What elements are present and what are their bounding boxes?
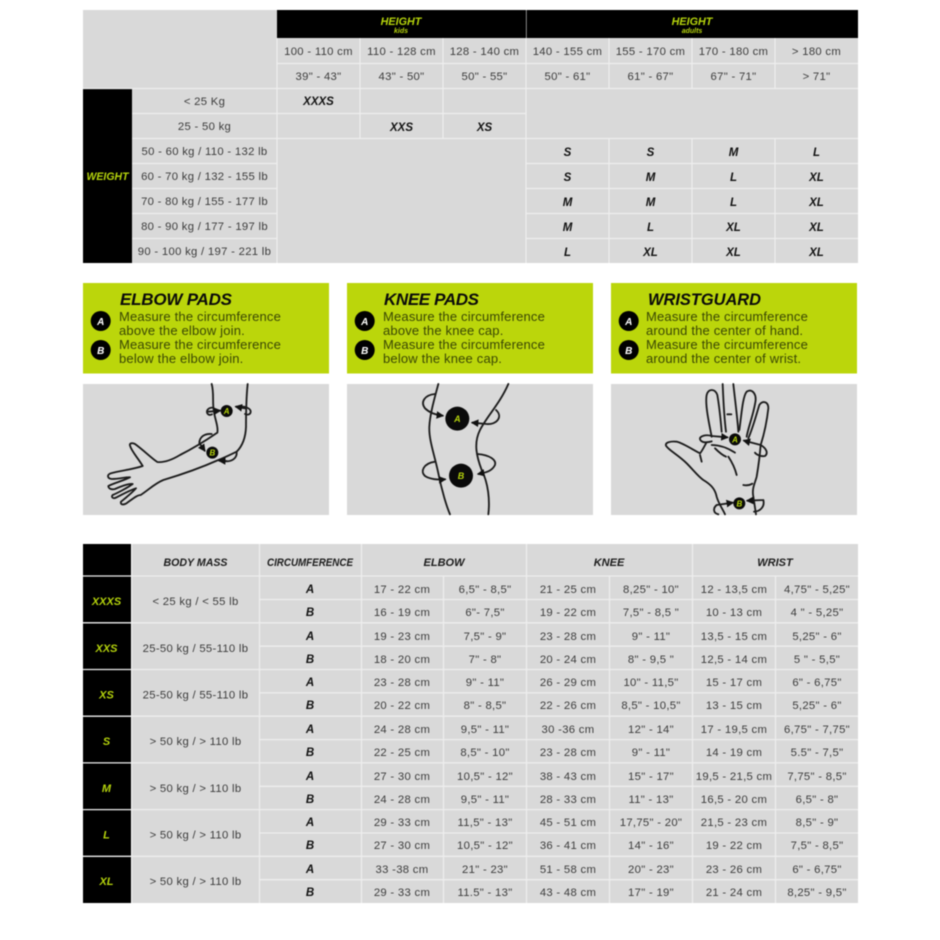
header: height adults (527, 10, 858, 38)
wristguard instructions text: around the center of wrist. (646, 351, 801, 366)
measurement values: 7,5" - 8,5" (791, 840, 843, 852)
measurement values: 51 - 58 cm (540, 864, 596, 876)
badge A: A (360, 317, 368, 328)
measurement values: 7" - 8" (469, 654, 501, 666)
circumference letters: B (306, 607, 314, 619)
size column: M (102, 783, 112, 795)
size results: XL (725, 222, 741, 234)
badge B: B (625, 346, 632, 357)
measurement values: 23 - 28 cm (540, 747, 596, 759)
marker B: B (736, 499, 742, 508)
illustration panel: arm with elbow measurement points (83, 384, 329, 515)
header: height adults: HEIGHT (672, 16, 714, 28)
measurement values: 21" - 23" (462, 864, 508, 876)
circumference letters: B (306, 747, 314, 759)
size column: S (103, 736, 111, 748)
badge A: A (624, 317, 632, 328)
size results: XL (808, 197, 824, 209)
measurement values: 19 - 22 cm (540, 607, 596, 619)
circumference letters: A (305, 864, 314, 876)
header: height kids: HEIGHT (381, 16, 423, 28)
measurement values: 9" - 11" (632, 631, 670, 643)
badge A (619, 311, 639, 331)
measurement values: 8,5" - 10" (460, 747, 510, 759)
height values: 61" - 67" (628, 71, 673, 83)
knee instructions text: Measure the circumference (383, 337, 545, 352)
size column: XXS (94, 643, 118, 655)
measurement values: 4 " - 5,25" (791, 607, 843, 619)
measurement values: 9" - 11" (466, 677, 504, 689)
measurement values: 15" - 17" (628, 771, 674, 783)
measurement values: 15 - 17 cm (706, 677, 762, 689)
measurement values: 20" - 23" (628, 864, 674, 876)
size results: XL (808, 247, 824, 259)
measurement values: 21 - 25 cm (540, 584, 596, 596)
size results: S (564, 172, 572, 184)
header: height kids: kids (394, 28, 408, 35)
measurement values: 6,75" - 7,75" (784, 724, 850, 736)
measurement values: 22 - 25 cm (374, 747, 430, 759)
height values: 43" - 50" (379, 71, 424, 83)
measurement values: 12" - 14" (628, 724, 674, 736)
measurement values: 14 - 19 cm (706, 747, 762, 759)
table headers (164, 557, 794, 569)
badge B (91, 340, 111, 360)
measurement values: 23 - 28 cm (540, 631, 596, 643)
measurement values: 36 - 41 cm (540, 840, 596, 852)
measurement values: 17 - 19,5 cm (701, 724, 767, 736)
measurement values: 7,75" - 8,5" (787, 771, 847, 783)
table headers: ELBOW (424, 557, 466, 569)
measurement values: 14" - 16" (628, 840, 674, 852)
measurement values: 12 - 13,5 cm (701, 584, 767, 596)
height values: > 180 cm (792, 46, 841, 58)
weight values (138, 96, 271, 258)
measurement values: 19,5 - 21,5 cm (696, 771, 772, 783)
knee instructions text (383, 309, 545, 366)
panel: elbow pads instructions (83, 283, 329, 374)
measurement values: 16,5 - 20 cm (701, 794, 767, 806)
measurement values: 9,5" - 11" (461, 724, 509, 736)
knee instructions text: below the knee cap. (383, 351, 502, 366)
measurement values: 11.5" - 13" (457, 887, 513, 899)
badge B: B (361, 346, 368, 357)
marker B (206, 447, 218, 459)
size results: S (647, 147, 655, 159)
body mass values (143, 596, 248, 888)
measurement values: 4,75" - 5,25" (784, 584, 850, 596)
measurement values: 13,5 - 15 cm (701, 631, 767, 643)
size results: S (564, 147, 572, 159)
measurement values: 5,25" - 6" (792, 700, 842, 712)
size results: XL (808, 172, 824, 184)
badge A: A (96, 317, 104, 328)
size column: XS (98, 690, 114, 702)
circumference letters: B (306, 887, 314, 899)
wristguard instructions text: Measure the circumference (646, 309, 808, 324)
circumference letters: B (306, 794, 314, 806)
circumference letters: A (305, 724, 314, 736)
circumference letters: A (305, 817, 314, 829)
badge A (91, 311, 111, 331)
measurement values: 45 - 51 cm (540, 817, 596, 829)
measurement values: 21 - 24 cm (706, 887, 762, 899)
body mass values: < 25 kg / < 55 lb (152, 596, 239, 608)
table headers: WRIST (757, 557, 794, 569)
header: height kids (277, 10, 526, 38)
body mass values: > 50 kg / > 110 lb (150, 876, 241, 888)
measurement values: 8,5" - 9" (796, 817, 838, 829)
size results: M (646, 172, 656, 184)
circumference letters: A (305, 771, 314, 783)
weight values: 25 - 50 kg (178, 121, 231, 133)
size column (83, 544, 131, 903)
measurement values: 9,5" - 11" (461, 794, 509, 806)
measurement values: 23 - 28 cm (374, 677, 430, 689)
panel: wristguard instructions: WRISTGUARD (648, 290, 761, 309)
size results: XXXS (302, 96, 334, 108)
circumference letters: A (305, 677, 314, 689)
size results: XL (642, 247, 658, 259)
table headers: CIRCUMFERENCE (267, 557, 354, 569)
panel: size table by height and weight (83, 10, 858, 263)
height values: 140 - 155 cm (533, 46, 602, 58)
measurement values: 9" - 11" (632, 747, 670, 759)
measurement values: 6" - 6,75" (792, 677, 842, 689)
weight values: 50 - 60 kg / 110 - 132 lb (142, 146, 268, 158)
measurement values: 21,5 - 23 cm (701, 817, 767, 829)
measurement values: 20 - 22 cm (374, 700, 430, 712)
circumference letters: B (306, 840, 314, 852)
measurement values: 30 -36 cm (542, 724, 594, 736)
panel: knee pads instructions (347, 283, 593, 374)
weight values: 60 - 70 kg / 132 - 155 lb (141, 171, 268, 183)
elbow instructions text: Measure the circumference (119, 309, 281, 324)
circumference letters: A (305, 584, 314, 596)
measurement values: 29 - 33 cm (374, 817, 430, 829)
header: height adults: adults (682, 28, 702, 35)
header: weight: WEIGHT (86, 171, 130, 183)
panel: knee pads instructions: KNEE PADS (384, 290, 480, 309)
measurement values: 19 - 23 cm (374, 631, 430, 643)
marker A: A (731, 435, 738, 444)
weight values: 80 - 90 kg / 177 - 197 lb (141, 221, 268, 233)
wristguard instructions text: around the center of hand. (646, 323, 803, 338)
measurement values: 7,5" - 9" (464, 631, 506, 643)
measurement values: 7,5" - 8,5 " (623, 607, 679, 619)
measurement values: 43 - 48 cm (540, 887, 596, 899)
size results: L (730, 172, 737, 184)
elbow instructions text: Measure the circumference (119, 337, 281, 352)
header: weight (83, 89, 132, 263)
measurement values: 18 - 20 cm (374, 654, 430, 666)
panel: body measurement table (83, 544, 858, 903)
badge B: B (97, 346, 104, 357)
table headers: KNEE (594, 557, 625, 569)
measurement values: 38 - 43 cm (540, 771, 596, 783)
measurement values: 33 -38 cm (376, 864, 428, 876)
marker B: B (209, 449, 215, 458)
circumference letters (305, 584, 314, 899)
size results: XL (808, 222, 824, 234)
measurement values: 10" - 11,5" (623, 677, 679, 689)
measurement values: 23 - 26 cm (706, 864, 762, 876)
size results: M (563, 222, 573, 234)
height values (284, 46, 841, 83)
measurement values: 10 - 13 cm (706, 607, 762, 619)
height values: 110 - 128 cm (367, 46, 436, 58)
measurement values: 6,5" - 8,5" (459, 584, 511, 596)
panel: elbow pads instructions: ELBOW PADS (120, 290, 233, 309)
measurement values: 24 - 28 cm (374, 724, 430, 736)
body mass values: > 50 kg / > 110 lb (150, 783, 241, 795)
measurement values: 27 - 30 cm (374, 840, 430, 852)
size results: XXS (389, 122, 413, 134)
size column: XXXS (91, 596, 122, 608)
measurement values: 10,5" - 12" (457, 840, 513, 852)
height values: 155 - 170 cm (616, 46, 685, 58)
elbow instructions text: above the elbow join. (119, 323, 245, 338)
height values: 128 - 140 cm (450, 46, 519, 58)
measurement values: 10,5" - 12" (457, 771, 513, 783)
weight values: 90 - 100 kg / 197 - 221 lb (138, 246, 271, 258)
wristguard instructions text: Measure the circumference (646, 337, 808, 352)
knee instructions text: above the knee cap. (383, 323, 504, 338)
height values: 100 - 110 cm (284, 46, 353, 58)
illustration panel: hand with wrist measurement points (611, 384, 857, 515)
badge B (619, 340, 639, 360)
marker A (221, 405, 233, 417)
measurement values: 19 - 22 cm (706, 840, 762, 852)
measurement values: 6"- 7,5" (465, 607, 505, 619)
body mass values: 25-50 kg / 55-110 lb (143, 690, 248, 702)
measurement values: 13 - 15 cm (706, 700, 762, 712)
size results (302, 96, 824, 259)
circumference letters: B (306, 654, 314, 666)
measurement values (374, 584, 850, 899)
marker A: A (453, 414, 461, 424)
measurement values: 26 - 29 cm (540, 677, 596, 689)
size results: L (813, 147, 820, 159)
table headers: BODY MASS (164, 557, 228, 569)
badge A (355, 311, 375, 331)
measurement values: 8" - 8,5" (464, 700, 506, 712)
measurement values: 17,75" - 20" (620, 817, 682, 829)
measurement values: 17 - 22 cm (374, 584, 430, 596)
measurement values: 20 - 24 cm (540, 654, 596, 666)
circumference letters: A (305, 631, 314, 643)
marker B: B (458, 471, 465, 481)
marker A: A (223, 407, 230, 416)
size column: XL (98, 876, 114, 888)
measurement values: 8,5" - 10,5" (621, 700, 681, 712)
measurement values: 29 - 33 cm (374, 887, 430, 899)
panel: wristguard instructions (611, 283, 857, 374)
height values: 170 - 180 cm (699, 46, 768, 58)
measurement values: 8" - 9,5 " (628, 654, 674, 666)
measurement values: 16 - 19 cm (374, 607, 430, 619)
size results: L (647, 222, 654, 234)
body mass values: > 50 kg / > 110 lb (150, 736, 241, 748)
elbow instructions text: below the elbow join. (119, 351, 243, 366)
measurement values: 22 - 26 cm (540, 700, 596, 712)
height values: 39" - 43" (296, 71, 341, 83)
measurement values: 6,5" - 8" (796, 794, 838, 806)
measurement values: 17" - 19" (628, 887, 674, 899)
measurement values: 6" - 6,75" (792, 864, 842, 876)
circumference letters: B (306, 700, 314, 712)
measurement values: 5 " - 5,5" (794, 654, 840, 666)
height values: 50" - 55" (462, 71, 507, 83)
measurement values: 24 - 28 cm (374, 794, 430, 806)
size results: L (564, 247, 571, 259)
size results: XL (725, 247, 741, 259)
elbow instructions text (119, 309, 281, 366)
body mass values: > 50 kg / > 110 lb (150, 830, 241, 842)
measurement values: 11" - 13" (628, 794, 674, 806)
height values: > 71" (803, 71, 830, 83)
size results: L (730, 197, 737, 209)
measurement values: 28 - 33 cm (540, 794, 596, 806)
measurement values: 5,25" - 6" (792, 631, 842, 643)
size results: XS (476, 122, 492, 134)
measurement values: 12,5 - 14 cm (701, 654, 767, 666)
body mass values: 25-50 kg / 55-110 lb (143, 643, 248, 655)
size results: M (646, 197, 656, 209)
badge B (355, 340, 375, 360)
knee instructions text: Measure the circumference (383, 309, 545, 324)
size column: L (103, 830, 110, 842)
measurement values: 8,25" - 9,5" (787, 887, 847, 899)
size results: M (563, 197, 573, 209)
measurement values: 11,5" - 13" (457, 817, 513, 829)
weight values: 70 - 80 kg / 155 - 177 lb (141, 196, 268, 208)
illustration panel: leg with knee measurement points (347, 384, 593, 515)
measurement values: 27 - 30 cm (374, 771, 430, 783)
height values: 67" - 71" (711, 71, 756, 83)
wristguard instructions text (646, 309, 808, 366)
measurement values: 8,25" - 10" (623, 584, 679, 596)
height values: 50" - 61" (545, 71, 590, 83)
size results: M (729, 147, 739, 159)
weight values: < 25 Kg (184, 96, 225, 108)
measurement values: 5.5" - 7,5" (791, 747, 843, 759)
